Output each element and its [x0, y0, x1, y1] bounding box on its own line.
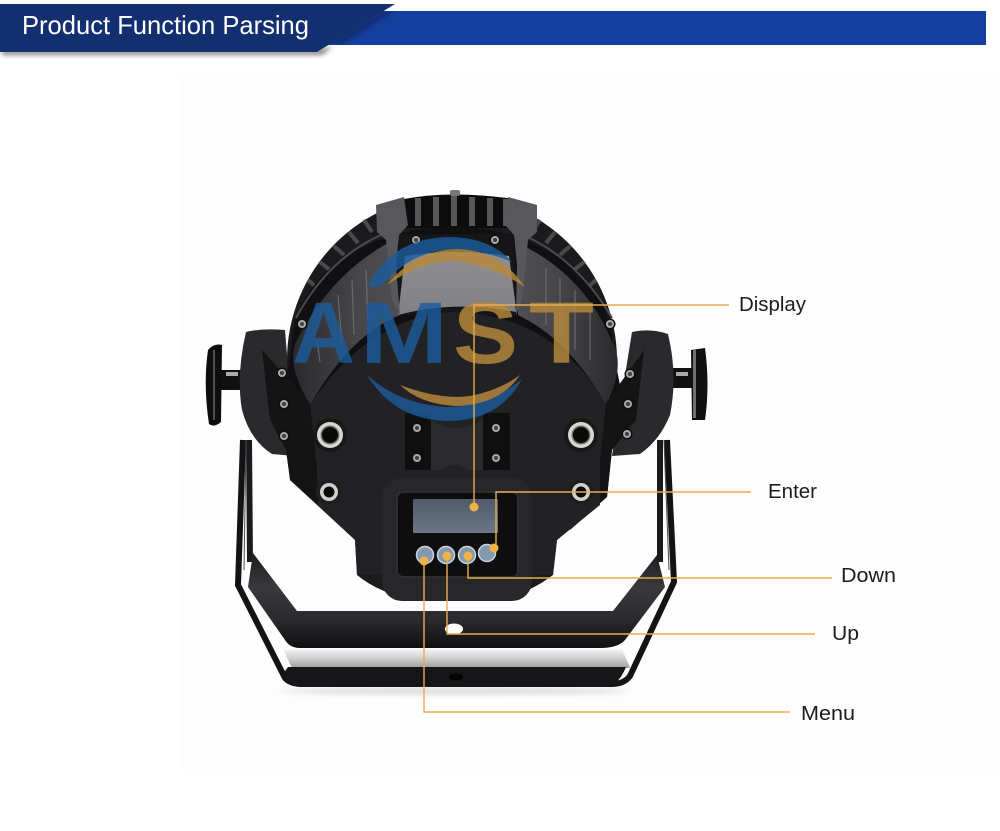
letter M: M	[360, 285, 448, 382]
callout: Down	[464, 552, 896, 587]
yoke lower bar	[282, 667, 626, 687]
letter S: S	[453, 285, 518, 382]
left panel ribs	[317, 270, 368, 362]
control plate	[382, 478, 532, 601]
letter T: T	[529, 285, 594, 382]
callout: Display: Display	[739, 294, 806, 316]
product photo: stage light rear view	[206, 190, 707, 694]
right bracket	[483, 413, 510, 470]
ring highlight	[296, 232, 612, 318]
blue header band	[326, 11, 986, 45]
right panel ribs	[546, 268, 590, 360]
hub side plate left	[262, 350, 345, 530]
right hub	[612, 330, 674, 456]
grey window panel	[398, 252, 516, 315]
top right block	[505, 197, 537, 315]
LCD display	[413, 499, 498, 533]
control buttons	[416, 544, 496, 564]
top fins	[404, 190, 514, 228]
ribbon edge shadow on band	[328, 11, 394, 45]
left ribbed panel	[293, 243, 400, 405]
callout: Menu	[420, 556, 855, 725]
hub side plate right	[570, 350, 644, 530]
connectors	[313, 418, 598, 505]
inner ring	[285, 227, 622, 420]
title: Product Function Parsing	[22, 10, 309, 40]
right knob	[670, 348, 708, 420]
side fins right	[532, 220, 596, 288]
callout: Enter	[490, 481, 817, 552]
left knob	[206, 345, 244, 426]
callout: Up	[442, 552, 859, 645]
yoke upper bar	[248, 553, 665, 648]
bottom blue arc	[367, 375, 522, 421]
top blue arc	[367, 237, 512, 287]
callout: Enter: Enter	[768, 481, 817, 503]
lower bar slot	[449, 674, 463, 680]
screws	[276, 234, 636, 464]
header banner	[0, 4, 986, 55]
top gold arc	[387, 249, 525, 287]
lower body	[316, 440, 600, 575]
silver base plate	[283, 649, 630, 668]
right ribbed panel	[518, 243, 618, 405]
callout: Display	[470, 294, 806, 512]
navy title ribbon	[0, 4, 395, 52]
left hub	[240, 329, 295, 456]
centre window	[398, 234, 518, 315]
rear cover	[310, 312, 606, 470]
callout: Up: Up	[832, 623, 859, 645]
control recess	[397, 492, 518, 577]
left bracket	[405, 413, 431, 470]
dome housing	[286, 195, 617, 601]
bottom gold arc	[400, 375, 520, 406]
banner shadow	[2, 46, 333, 55]
side fins left	[308, 220, 372, 288]
callout: Down: Down	[841, 565, 896, 587]
photo background	[182, 73, 1000, 770]
floor shadow	[280, 688, 630, 694]
letter A: A	[292, 285, 355, 382]
yoke bracket	[238, 440, 674, 684]
bracket centre notch	[431, 420, 483, 470]
AMST watermark	[292, 237, 594, 421]
top left block	[376, 197, 408, 315]
callout: Menu: Menu	[801, 703, 855, 725]
bar mounting hole	[445, 624, 463, 634]
